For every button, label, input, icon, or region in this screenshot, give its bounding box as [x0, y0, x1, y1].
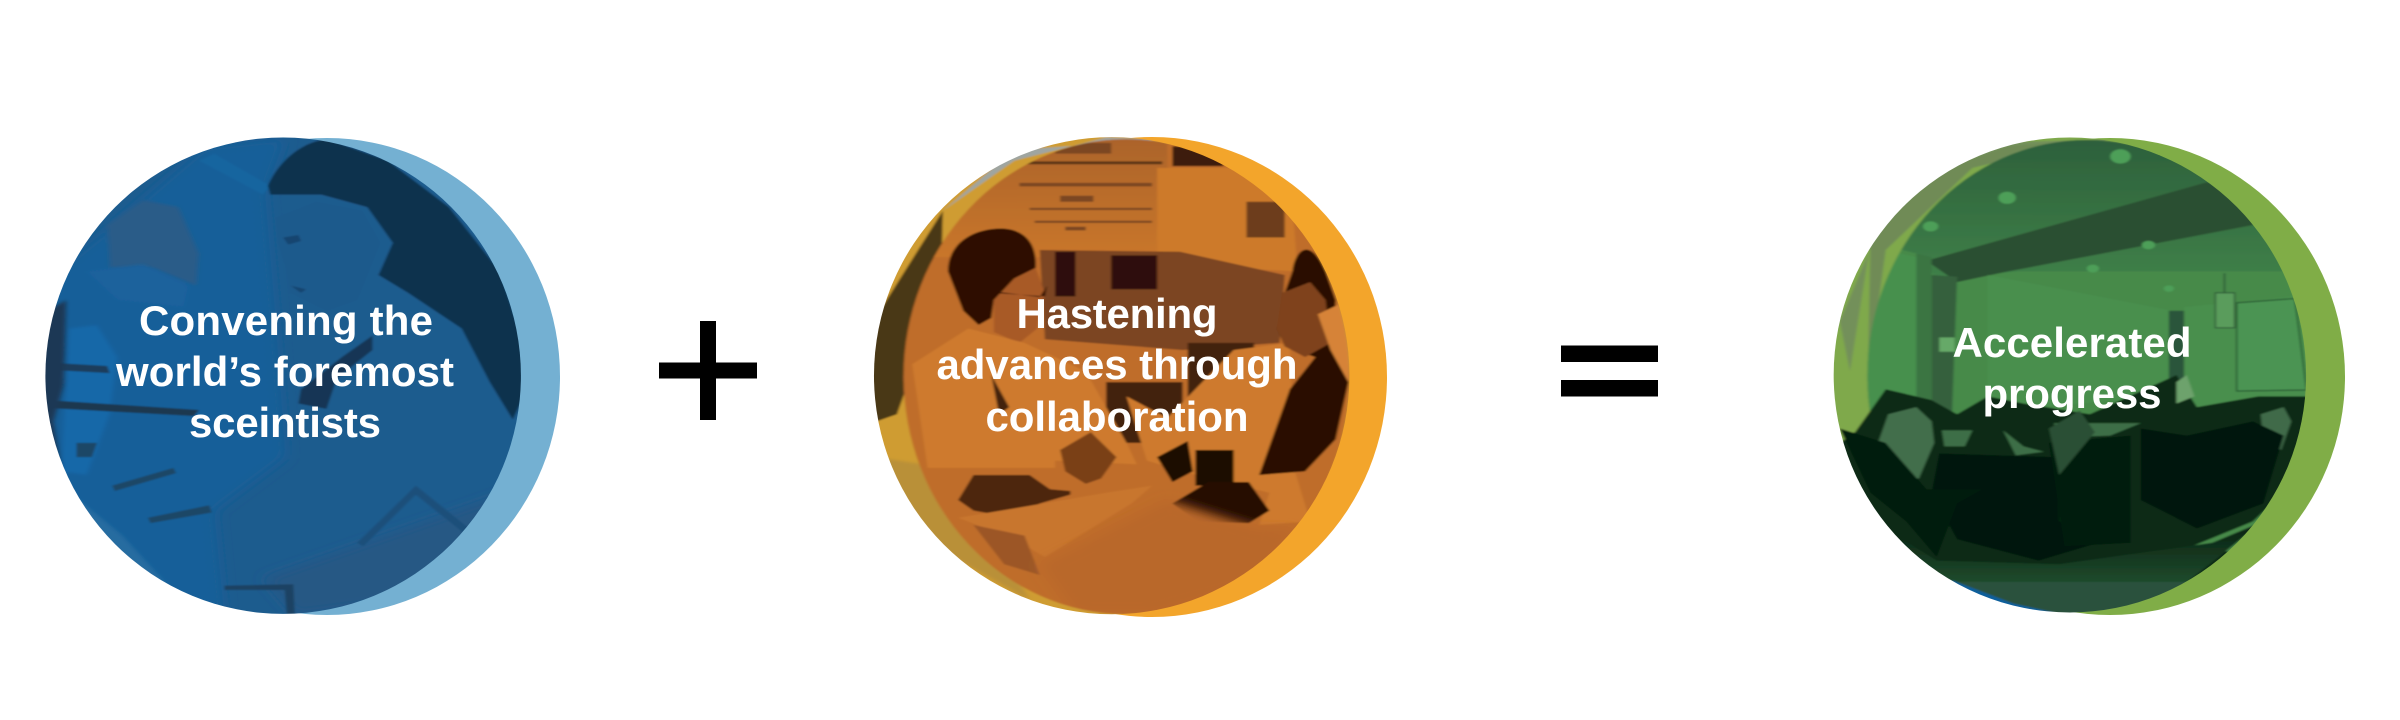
text: convening the world's foremost scientists: sceintists: [189, 399, 381, 446]
green back disc: [1875, 138, 2345, 615]
photo: two scientists talking, orange duotone: [861, 129, 1361, 621]
photo: meeting room, green duotone: [1824, 132, 2314, 621]
text: convening the world's foremost scientists: Convening the: [139, 297, 433, 344]
text: convening the world's foremost scientists: [115, 297, 454, 446]
orange back disc: [917, 137, 1387, 617]
panel: hastening advances (orange circle): [861, 129, 1387, 621]
text: accelerated progress: Accelerated: [1952, 319, 2192, 366]
blue back disc: [94, 138, 560, 615]
text: hastening advances through collaboration: Hastening: [1016, 290, 1218, 337]
text: convening the world's foremost scientists: world’s foremost: [115, 348, 454, 395]
icon: equals sign: [1561, 346, 1658, 396]
panel: accelerated progress (green circle): [1824, 132, 2345, 621]
text: accelerated progress: [1952, 319, 2192, 417]
text: hastening advances through collaboration: advances through: [936, 341, 1298, 388]
text: hastening advances through collaboration: [936, 290, 1298, 440]
text: hastening advances through collaboration: collaboration: [986, 393, 1248, 440]
icon: plus sign: [659, 321, 757, 420]
text: accelerated progress: progress: [1982, 370, 2162, 417]
photo: scientist at lab bench, blue duotone: [31, 129, 541, 621]
panel: convening scientists (blue circle): [31, 129, 560, 621]
